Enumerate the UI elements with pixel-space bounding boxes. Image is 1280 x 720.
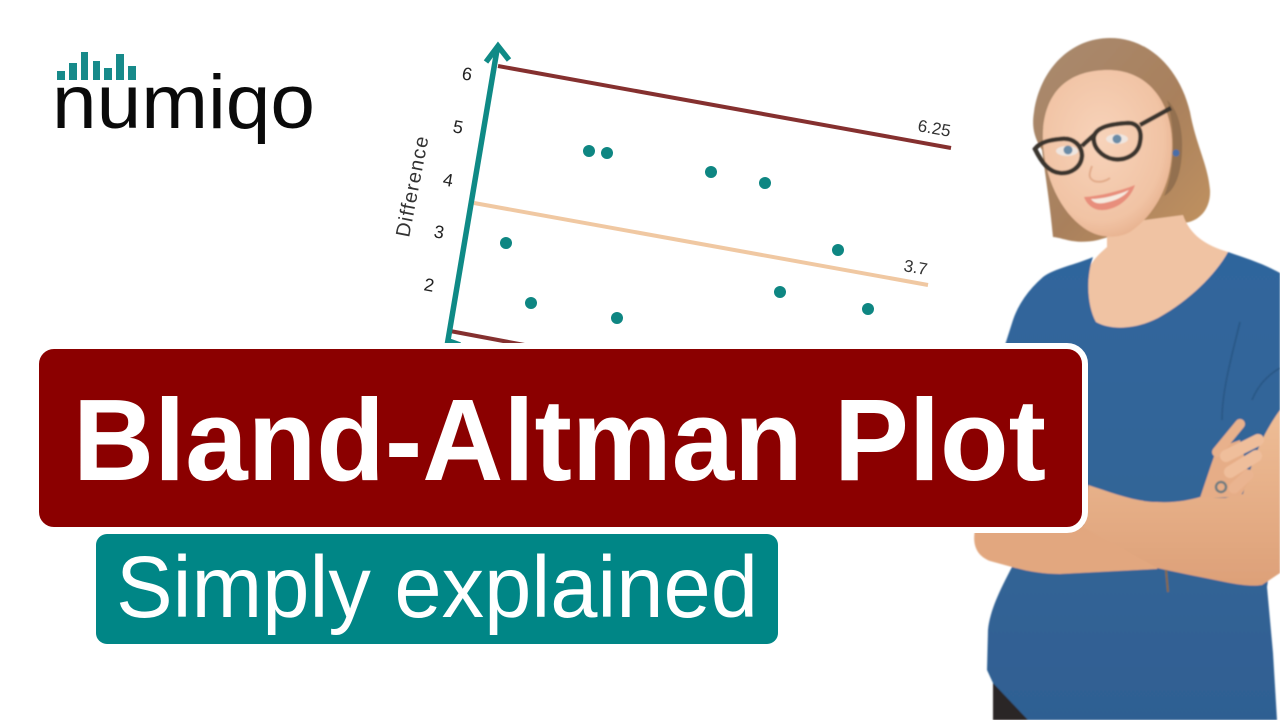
axis tick labels: 4 <box>441 169 455 191</box>
earring <box>1172 150 1180 156</box>
axis tick labels: 6 <box>460 63 474 85</box>
axis title: Difference: Difference <box>392 135 433 239</box>
shirt <box>987 252 1280 720</box>
subtitle badge <box>96 534 778 644</box>
front forearm and upper arm <box>1083 410 1280 586</box>
sleeve crease <box>1222 322 1280 420</box>
axis tick labels: 2 <box>422 274 436 296</box>
presenter illustration <box>974 38 1280 720</box>
logo: numiqo <box>52 52 315 145</box>
logo icon: teal bars <box>57 52 136 80</box>
back forearm <box>974 525 1175 574</box>
lower limit line <box>450 331 530 346</box>
subtitle text: Simply explained <box>116 539 758 636</box>
ring <box>1216 482 1226 492</box>
neck and chest <box>1086 215 1228 328</box>
eyes <box>1056 134 1128 156</box>
banner background <box>36 346 1085 530</box>
upper limit line <box>498 66 951 148</box>
mouth <box>1084 185 1135 210</box>
glasses <box>1035 108 1171 173</box>
logo wordmark: numiqo <box>52 60 315 145</box>
nose shadow <box>1090 166 1110 182</box>
chart: Bland-Altman scatter plot <box>392 46 952 352</box>
line label 3.7: 3.7 <box>902 256 929 279</box>
line label 6.25: 6.25 <box>916 116 952 141</box>
title banner <box>36 346 1085 530</box>
bracelet <box>1166 570 1168 592</box>
legging <box>993 680 1032 720</box>
face <box>1043 70 1172 237</box>
axis tick labels <box>422 63 474 296</box>
hair shadow right of face <box>1164 100 1182 196</box>
axis tick labels: 3 <box>432 221 446 243</box>
y axis arrow <box>446 46 509 352</box>
hand and fingers <box>1200 424 1258 498</box>
axis tick labels: 5 <box>451 116 465 138</box>
data points <box>500 145 874 324</box>
mean line <box>474 203 928 285</box>
hair <box>1033 38 1210 242</box>
title text: Bland-Altman Plot <box>73 375 1046 505</box>
badge background <box>96 534 778 644</box>
